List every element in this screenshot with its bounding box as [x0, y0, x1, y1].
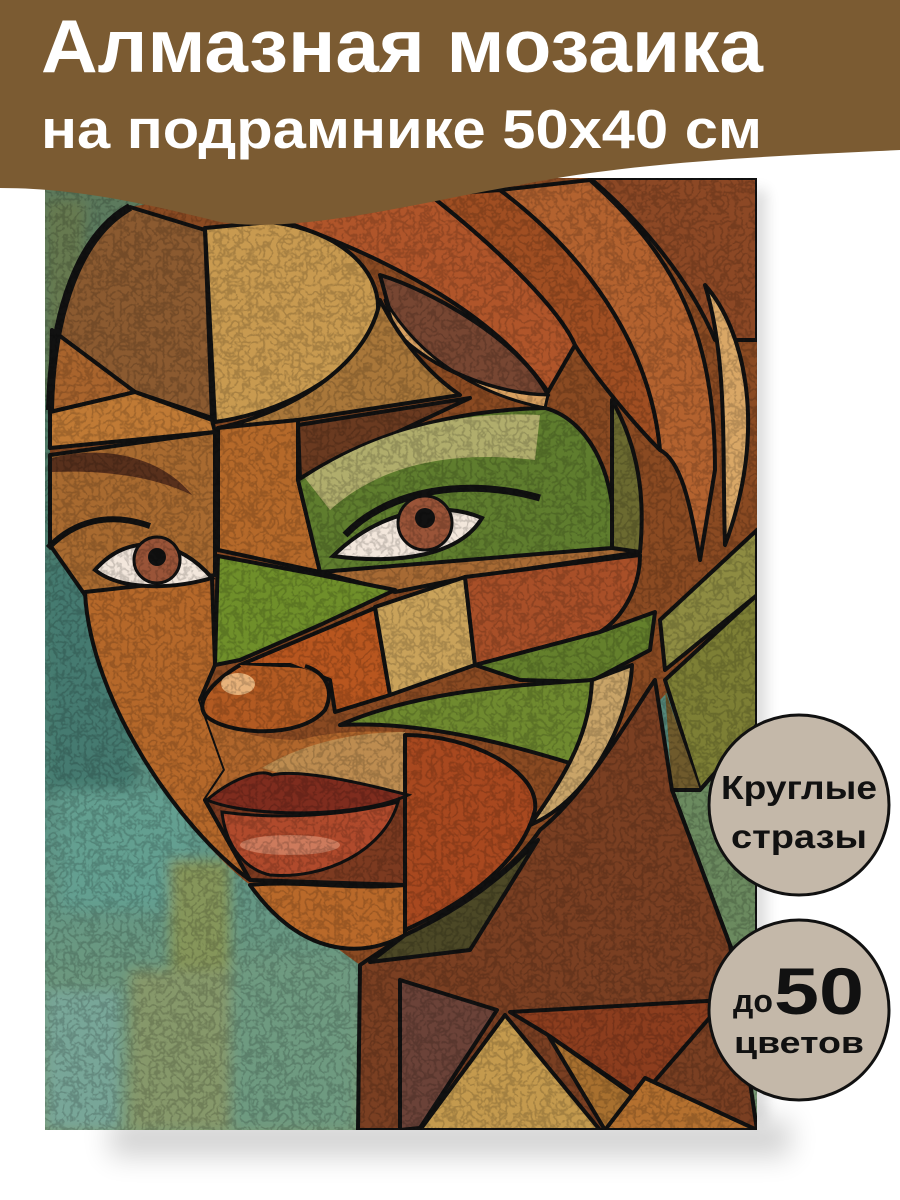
right eye lower [320, 545, 640, 592]
green strip [475, 612, 655, 682]
head base [50, 178, 757, 964]
neck triangles [400, 980, 497, 1130]
brow right [298, 398, 470, 478]
hair and upper head [50, 178, 757, 1000]
face panels [50, 392, 757, 1130]
badge: up to 50 colours: до [733, 983, 773, 1019]
painting [45, 178, 757, 1130]
red panel [465, 555, 640, 665]
eyeshadow [298, 408, 613, 572]
nose bridge [218, 420, 320, 572]
left cheek [85, 578, 250, 880]
neck jaw [358, 680, 757, 1130]
canvas shadow [110, 190, 790, 1156]
green mask [215, 556, 395, 665]
title: Алмазная мозаика [41, 4, 764, 88]
nose [202, 665, 329, 731]
badge: up to 50 colours: цветов [734, 1025, 864, 1060]
red cheek [405, 735, 535, 930]
banner [0, 0, 900, 225]
badge: up to 50 colours: 50 [774, 954, 864, 1028]
left brow [52, 453, 192, 495]
under nose tan [262, 732, 405, 795]
left forehead strip [50, 392, 215, 448]
green strip lower [340, 680, 592, 770]
left eye [48, 519, 212, 586]
badge: round rhinestones [709, 715, 889, 895]
badge: round rhinestones: стразы [731, 818, 867, 855]
head outline [50, 207, 130, 410]
left eye surround [50, 432, 215, 595]
lips [207, 773, 408, 876]
chin and jaw cheek [205, 795, 405, 885]
nose highlight [221, 673, 255, 695]
under nose skin [200, 700, 405, 800]
badge: up to 50 colours [709, 920, 889, 1100]
background patches [45, 200, 355, 1130]
hair side [612, 400, 642, 552]
right eye [333, 488, 540, 559]
subtitle: на подрамнике 50х40 см [41, 98, 762, 160]
crackle texture [45, 178, 757, 1130]
tan square [375, 577, 475, 695]
orange panel [240, 608, 390, 712]
badge: round rhinestones: Круглые [721, 769, 877, 806]
